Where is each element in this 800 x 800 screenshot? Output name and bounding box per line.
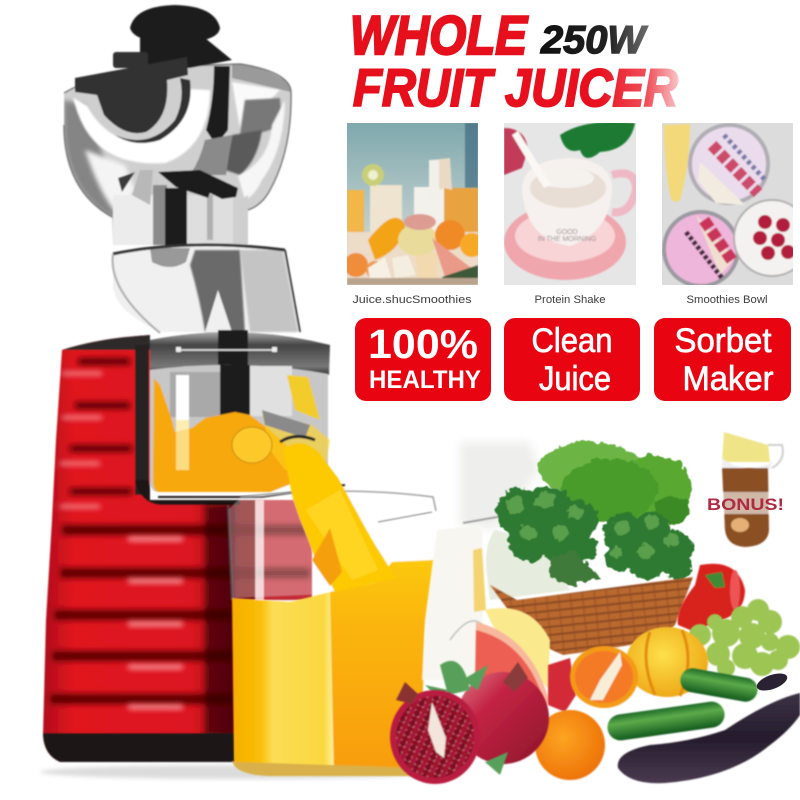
photo: smoothies bowl xyxy=(662,123,800,288)
spout xyxy=(262,412,330,470)
black pusher knob xyxy=(113,5,232,68)
neck: white tube left xyxy=(113,195,153,250)
photo: protein shake xyxy=(504,122,636,285)
eggplant xyxy=(618,693,800,783)
dark inner crescent xyxy=(115,78,191,143)
middle chamber xyxy=(113,245,300,332)
hopper bowl xyxy=(60,60,300,250)
cabbage xyxy=(486,530,570,600)
photo: juice and smoothies xyxy=(344,123,484,285)
caption: protein shake: Protein Shake xyxy=(535,294,605,306)
pumpkin xyxy=(626,627,708,697)
red bell pepper xyxy=(678,564,745,632)
juice jug xyxy=(228,443,437,776)
whole pomegranate xyxy=(457,662,549,764)
cut pomegranate xyxy=(390,682,480,784)
red apple xyxy=(548,658,576,712)
backdrop: pale building and milk jug xyxy=(422,442,540,680)
caption: smoothies bowl: Smoothies Bowl xyxy=(686,294,768,306)
glass juice chamber xyxy=(150,365,328,492)
bonus bottle xyxy=(705,432,787,547)
motor body: red ribbed base xyxy=(40,335,315,765)
heading line: FRUIT JUICER: FRUIT JUICER xyxy=(353,59,678,118)
badge: 100% healthy: 100% xyxy=(368,321,478,367)
feed tube column xyxy=(153,185,167,245)
photo: protein shake: GOOD xyxy=(556,229,578,236)
leaves xyxy=(425,661,508,775)
dark deflector xyxy=(158,170,238,199)
broccoli xyxy=(496,486,693,586)
badge: clean juice: Clean xyxy=(532,322,612,360)
badge: clean juice: Juice xyxy=(539,360,611,398)
badge: sorbet maker xyxy=(654,318,791,401)
badge: clean juice xyxy=(504,318,640,401)
collar ring xyxy=(150,332,330,375)
window frame lip xyxy=(158,485,345,497)
right side basin xyxy=(232,62,291,92)
badge: 100% healthy xyxy=(355,318,491,401)
dark vertical bar xyxy=(206,66,230,145)
lettuce xyxy=(538,442,691,524)
grapefruit slice xyxy=(475,622,549,735)
whole orange xyxy=(535,710,605,780)
green grapes xyxy=(689,599,800,677)
wicker basket xyxy=(490,577,693,655)
heading line: WHOLE: WHOLE xyxy=(350,4,529,66)
lemon xyxy=(485,608,550,688)
white crescent under lid xyxy=(78,92,207,160)
badge: sorbet maker: Sorbet xyxy=(674,322,772,360)
juice left column xyxy=(232,592,334,775)
title: whole fruit juicer xyxy=(350,4,678,118)
juice right column xyxy=(330,560,436,775)
floor shadow under machine xyxy=(40,765,440,779)
juice stream pouring xyxy=(283,443,396,592)
badge: sorbet maker: Maker xyxy=(682,360,774,398)
badge: 100% healthy: HEALTHY xyxy=(369,366,481,394)
orange half xyxy=(570,646,638,708)
juicer machine xyxy=(40,5,345,765)
bonus label: BONUS! xyxy=(707,495,784,514)
power rating: 250W: 250W xyxy=(540,19,648,62)
shaded left bowl wall xyxy=(64,98,114,220)
caption: juice smoothies: Juice.shucSmoothies xyxy=(352,294,472,306)
photo: protein shake: IN THE MORNING xyxy=(538,236,596,243)
chute lid xyxy=(75,57,188,133)
second eggplant tip xyxy=(755,670,789,694)
juice in chamber xyxy=(153,378,300,492)
cucumbers xyxy=(606,666,759,742)
